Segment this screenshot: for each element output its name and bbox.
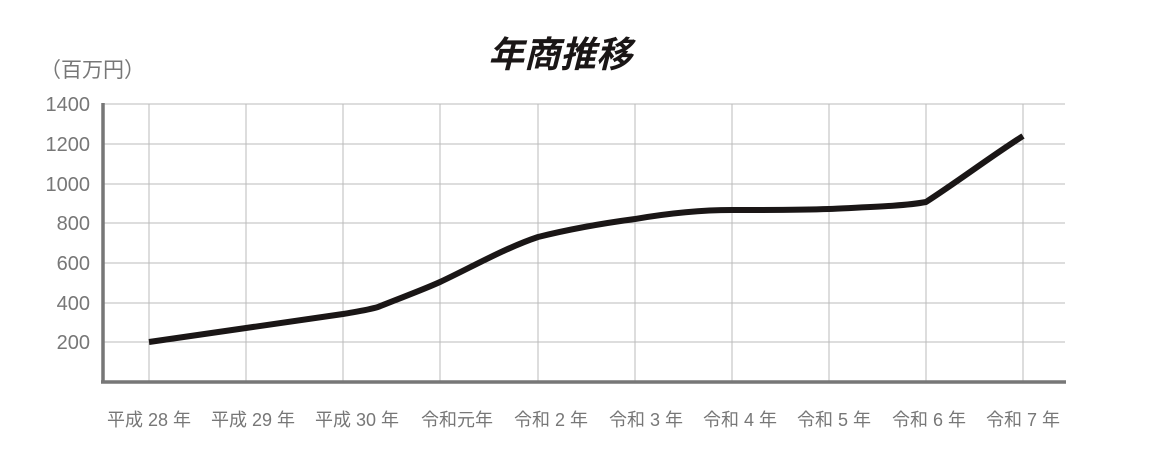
- x axis labels: 令和 3 年: [609, 410, 683, 430]
- x axis labels: 令和 2 年: [514, 410, 588, 430]
- y axis labels: 1400: [46, 94, 90, 116]
- y axis labels: 1200: [46, 134, 90, 156]
- x axis labels: 令和 7 年: [986, 410, 1060, 430]
- title: 年商推移: [488, 26, 636, 78]
- x axis labels: 平成 29 年: [211, 410, 295, 430]
- x axis labels: 平成 30 年: [315, 410, 399, 430]
- x axis labels: 令和元年: [421, 410, 493, 430]
- y axis labels: 1000: [46, 174, 90, 196]
- y axis labels: 400: [57, 293, 90, 315]
- x axis labels: 令和 5 年: [797, 410, 871, 430]
- line chart: revenue: [149, 136, 1023, 342]
- x axis labels: 令和 4 年: [703, 410, 777, 430]
- x axis labels: 平成 28 年: [107, 410, 191, 430]
- y axis labels: 200: [57, 332, 90, 354]
- unit label: （百万円）: [40, 54, 145, 84]
- x axis labels: [107, 410, 1060, 430]
- y axis labels: 600: [57, 253, 90, 275]
- grid: [102, 104, 1065, 382]
- y axis labels: 800: [57, 213, 90, 235]
- axes: [101, 103, 1066, 383]
- x axis labels: 令和 6 年: [892, 410, 966, 430]
- y axis labels: [46, 94, 90, 354]
